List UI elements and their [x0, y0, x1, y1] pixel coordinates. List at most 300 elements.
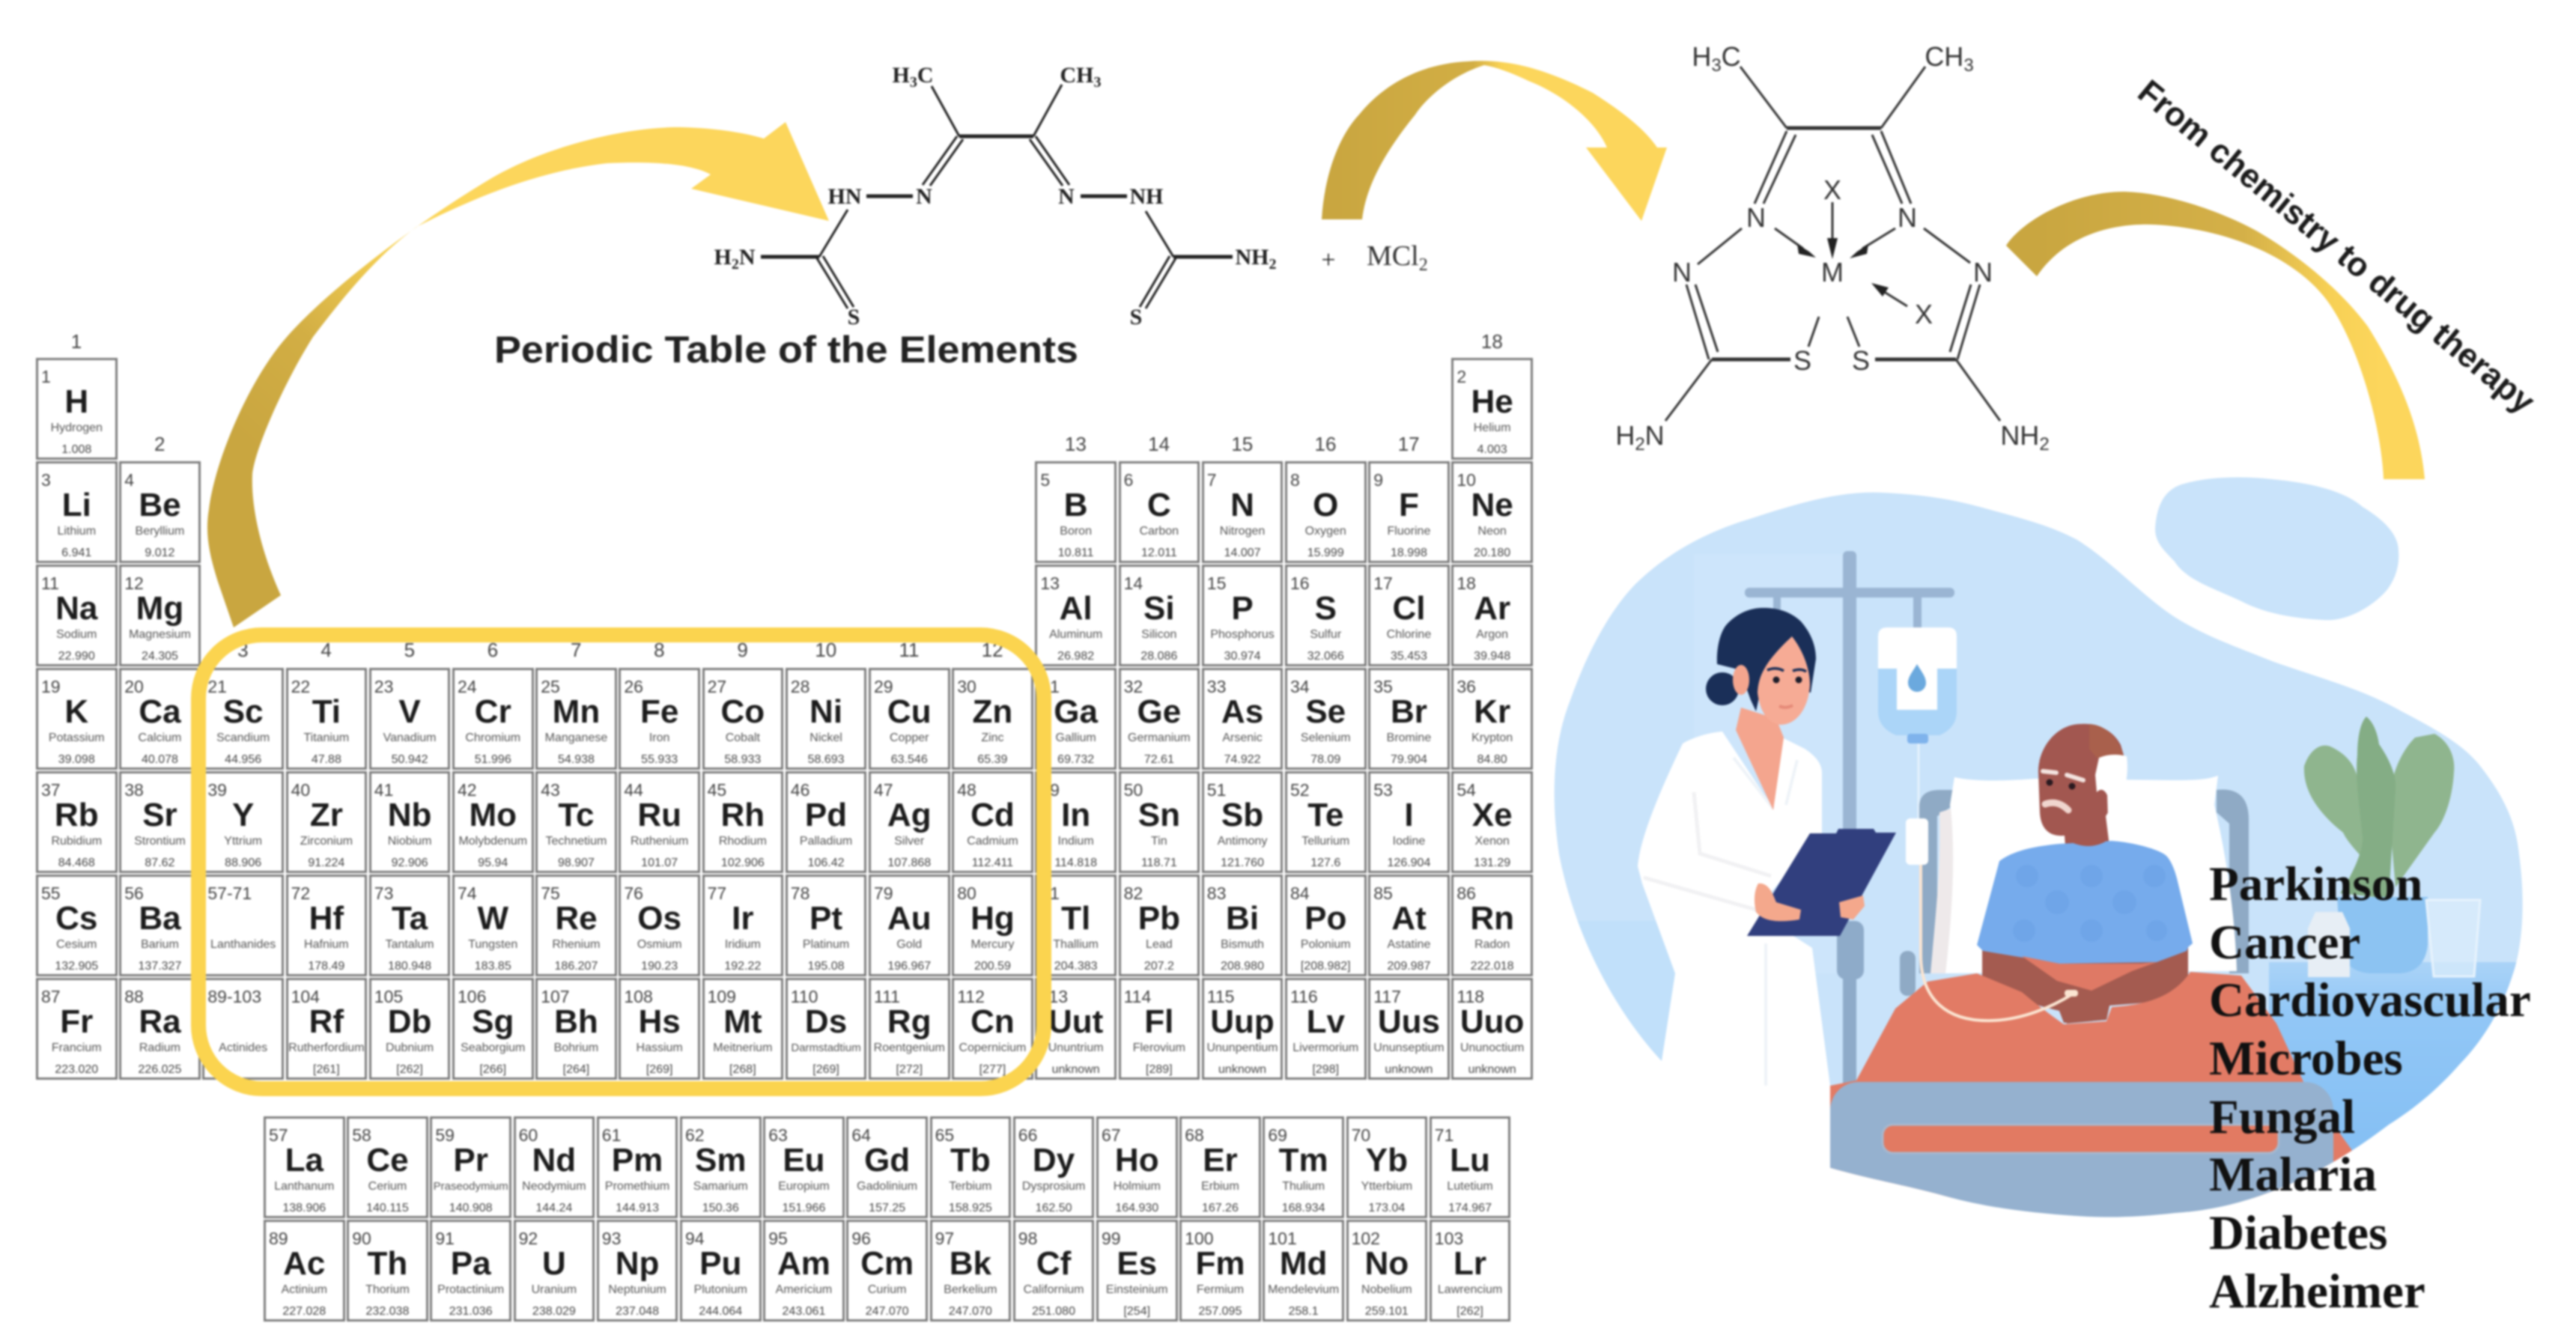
element Sb: 121.760	[1221, 857, 1264, 869]
group numbers: 11	[899, 639, 920, 661]
element In: 114.818	[1054, 857, 1097, 869]
element U: 92	[519, 1229, 538, 1248]
metal complex molecule: CH	[1925, 41, 1963, 72]
element Cl: Cl	[1392, 590, 1425, 627]
element Db: Db	[388, 1003, 431, 1040]
element Tl	[1035, 875, 1117, 976]
element Hs: [269]	[646, 1063, 672, 1075]
element In: 49	[1040, 780, 1060, 800]
metal complex molecule	[1615, 41, 2050, 454]
element H: 1	[41, 367, 51, 386]
periodic table main grid	[34, 330, 1534, 1081]
element Te: Te	[1307, 797, 1343, 833]
element Ti: 22	[291, 677, 310, 696]
actinides placeholder: 89-103	[207, 987, 261, 1006]
element Hf: 72	[291, 884, 310, 903]
element Lu: 71	[1435, 1125, 1453, 1145]
element Nb	[369, 771, 450, 873]
element Md: Md	[1280, 1245, 1327, 1282]
element U: U	[542, 1245, 566, 1282]
element Xe: Xenon	[1475, 834, 1510, 848]
element Pb	[1119, 875, 1200, 976]
element Tl: 204.383	[1054, 960, 1098, 972]
element Ds: Ds	[805, 1003, 847, 1040]
group numbers: 4	[321, 639, 332, 661]
element Rf	[286, 978, 367, 1080]
element Ta: 73	[374, 884, 393, 903]
element Yb: 70	[1352, 1125, 1370, 1145]
group numbers: 2	[154, 433, 165, 455]
element Md: 101	[1268, 1229, 1297, 1248]
group numbers	[71, 330, 1504, 661]
element H: 1.008	[61, 443, 91, 455]
element Te: 127.6	[1310, 857, 1340, 869]
metal complex molecule: NH	[2000, 420, 2039, 451]
element As: 33	[1207, 677, 1226, 696]
element P	[1202, 565, 1283, 666]
element Ac	[264, 1220, 344, 1321]
lanthanides placeholder	[202, 875, 284, 976]
disease list: Fungal	[2209, 1090, 2355, 1144]
element Lu: 174.967	[1448, 1201, 1492, 1214]
element Tm: Thulium	[1282, 1180, 1325, 1192]
element Cm: Cm	[860, 1245, 914, 1282]
element Db: [262]	[396, 1063, 423, 1075]
element Hg: Hg	[970, 900, 1015, 937]
element Mt	[702, 978, 783, 1080]
main background blob	[1543, 479, 2531, 1232]
element Mn: Mn	[553, 693, 600, 730]
element Mo: 95.94	[478, 857, 508, 869]
element Na: 11	[41, 574, 59, 593]
face	[1758, 636, 1810, 725]
element Th: 232.038	[366, 1304, 409, 1318]
element Fr: Francium	[52, 1041, 102, 1054]
element Ca: 40.078	[142, 753, 178, 765]
element N: Nitrogen	[1220, 524, 1265, 538]
element I: 53	[1373, 780, 1393, 800]
element Ba: Ba	[139, 900, 181, 937]
element Ba: Barium	[141, 937, 179, 951]
element Fe: Iron	[649, 731, 669, 744]
element Mo: Mo	[469, 797, 517, 833]
element S: 32.066	[1307, 650, 1344, 662]
doctor	[1638, 608, 1896, 1176]
element Nd: Neodymium	[522, 1180, 586, 1192]
bed footboard	[1830, 1082, 2333, 1232]
element Si: Si	[1143, 590, 1175, 627]
metal complex molecule: H	[1615, 420, 1635, 451]
group numbers: 5	[404, 639, 415, 661]
element Xe: Xe	[1472, 797, 1513, 833]
element Am: Americium	[776, 1283, 832, 1295]
ligand molecule: 2	[1269, 256, 1276, 273]
element Dy	[1013, 1116, 1094, 1217]
element Na: Sodium	[56, 627, 97, 641]
element Rg: Rg	[887, 1003, 932, 1040]
element Np: Neptunium	[608, 1283, 666, 1295]
element Zn: Zinc	[981, 731, 1004, 744]
element Ir	[702, 875, 783, 976]
element Ne: Ne	[1471, 487, 1513, 523]
element La: 138.906	[282, 1201, 326, 1214]
element Pt: Platinum	[803, 937, 849, 951]
element Si	[1119, 565, 1200, 666]
element Fm: 100	[1185, 1229, 1214, 1248]
element Sc: Scandium	[216, 731, 270, 744]
element Fl: [289]	[1146, 1063, 1173, 1075]
element Sb: 51	[1207, 780, 1226, 800]
element Se	[1285, 668, 1366, 770]
element Ru	[619, 771, 700, 873]
element Pm	[597, 1116, 678, 1217]
actinides placeholder	[202, 978, 284, 1080]
element Mo: 42	[458, 780, 477, 800]
element Pa: 91	[435, 1229, 455, 1248]
element Np	[597, 1220, 678, 1321]
element Bk: Berkelium	[944, 1283, 997, 1295]
element O: O	[1313, 487, 1338, 523]
element Rb: 84.468	[58, 857, 95, 869]
arrow: periodic table to ligand	[207, 122, 829, 627]
element Bh	[535, 978, 617, 1080]
element He: Helium	[1474, 421, 1511, 434]
element Y: Yttrium	[224, 834, 262, 848]
element Mg: 24.305	[142, 650, 178, 662]
element Ca: Ca	[139, 693, 181, 730]
element Pt	[786, 875, 866, 976]
plus sign and metal salt: MCl	[1367, 240, 1419, 272]
element Ni: 58.693	[808, 753, 845, 765]
blanket	[1829, 970, 2353, 1163]
element Os: Os	[637, 900, 681, 937]
element V: Vanadium	[383, 731, 436, 744]
element Cr: 24	[458, 677, 477, 696]
element Bh: 107	[541, 987, 570, 1006]
element Xe: 131.29	[1474, 857, 1510, 869]
element Nd: 60	[519, 1125, 538, 1145]
element Sm	[680, 1116, 761, 1217]
element Zn: 65.39	[977, 753, 1007, 765]
neck	[1736, 708, 1784, 810]
element Sr: 87.62	[145, 857, 174, 869]
element Sn: Sn	[1138, 797, 1180, 833]
element Br	[1368, 668, 1450, 770]
lanthanides placeholder: 57-71	[207, 884, 252, 903]
metal complex molecule: 2	[2039, 434, 2050, 454]
element Uus: Ununseptium	[1373, 1041, 1445, 1054]
element Be: Be	[139, 487, 181, 523]
element Cr: 51.996	[475, 753, 511, 765]
element Sb: Antimony	[1218, 834, 1267, 848]
element Li	[36, 461, 117, 563]
element Sm: Samarium	[693, 1180, 748, 1192]
element Ge: Germanium	[1128, 731, 1191, 744]
element Uuo: Ununoctium	[1460, 1041, 1524, 1054]
element U: Uranium	[532, 1283, 577, 1295]
element Li: Lithium	[57, 524, 96, 538]
element Cl: Chlorine	[1387, 627, 1431, 641]
element Cs	[36, 875, 117, 976]
element Ca	[119, 668, 201, 770]
element Pd	[786, 771, 866, 873]
element At	[1368, 875, 1450, 976]
metal complex molecule: X	[1915, 299, 1933, 329]
element Uut: Ununtrium	[1048, 1041, 1104, 1054]
element Es: [254]	[1123, 1304, 1150, 1318]
element Cl	[1368, 565, 1450, 666]
ligand molecule: NH	[1236, 245, 1269, 270]
element Sn: Tin	[1151, 834, 1167, 848]
element Ni: 28	[791, 677, 809, 696]
element Cn: Cn	[970, 1003, 1015, 1040]
element Te: 52	[1290, 780, 1310, 800]
element Ta	[369, 875, 450, 976]
element Uup: Ununpentium	[1206, 1041, 1278, 1054]
metal complex molecule: N	[1898, 202, 1917, 233]
element Mt: 109	[708, 987, 736, 1006]
element W	[452, 875, 533, 976]
element Ds: [269]	[812, 1063, 839, 1075]
element In	[1035, 771, 1117, 873]
ligand molecule: HN	[828, 184, 862, 209]
element Uus: Uus	[1378, 1003, 1440, 1040]
element Rb	[36, 771, 117, 873]
element Br: Bromine	[1387, 731, 1431, 744]
element Kr	[1451, 668, 1533, 770]
element Zn: 30	[957, 677, 976, 696]
element Eu: 63	[768, 1125, 788, 1145]
element Gd: 64	[851, 1125, 871, 1145]
element Ce: Ce	[366, 1142, 409, 1179]
element Cu: 63.546	[891, 753, 928, 765]
element Sr	[119, 771, 201, 873]
element Fl: Fl	[1144, 1003, 1173, 1040]
element Hs	[619, 978, 700, 1080]
element Ne: Neon	[1478, 524, 1507, 538]
ligand molecule: H	[892, 63, 910, 88]
element Co	[702, 668, 783, 770]
element Kr: 84.80	[1477, 753, 1507, 765]
element Be: 9.012	[145, 547, 174, 559]
element Uuo: 118	[1456, 987, 1484, 1006]
element Uuo	[1451, 978, 1533, 1080]
element Sr: 38	[124, 780, 144, 800]
element Tb: 158.925	[949, 1201, 992, 1214]
element Os	[619, 875, 700, 976]
element Uup: Uup	[1210, 1003, 1275, 1040]
group numbers: 9	[737, 639, 748, 661]
element Al: Al	[1060, 590, 1093, 627]
element Ne: 20.180	[1474, 547, 1510, 559]
element Es: Es	[1117, 1245, 1157, 1282]
element Fr	[36, 978, 117, 1080]
element As: Arsenic	[1222, 731, 1263, 744]
element Tb: Tb	[950, 1142, 991, 1179]
element Al: 13	[1040, 574, 1060, 593]
element Dy: Dysprosium	[1022, 1180, 1085, 1192]
element Ar: 18	[1456, 574, 1476, 593]
element Uus: unknown	[1385, 1063, 1433, 1075]
element Fr: 87	[41, 987, 61, 1006]
element Ar	[1451, 565, 1533, 666]
element Hg	[952, 875, 1033, 976]
element At: 85	[1373, 884, 1393, 903]
IV pole	[1745, 551, 1954, 1093]
element Cf	[1013, 1220, 1094, 1321]
element Db: 105	[374, 987, 403, 1006]
element C: Carbon	[1140, 524, 1179, 538]
ear	[1733, 665, 1749, 695]
element Re: 186.207	[555, 960, 598, 972]
element Sc	[202, 668, 284, 770]
element Rg: Roentgenium	[874, 1041, 945, 1054]
element Pu: Pu	[699, 1245, 741, 1282]
element Ru: 44	[624, 780, 643, 800]
element Cm	[846, 1220, 928, 1321]
element N: 7	[1207, 470, 1217, 490]
element Rn	[1451, 875, 1533, 976]
element La: 57	[269, 1125, 288, 1145]
metal complex molecule: N	[1746, 202, 1766, 233]
element Uut: 113	[1040, 987, 1068, 1006]
element Re: Rhenium	[552, 937, 600, 951]
element Po: Polonium	[1301, 937, 1351, 951]
element Te	[1285, 771, 1366, 873]
element V	[369, 668, 450, 770]
element K: K	[64, 693, 88, 730]
element Xe	[1451, 771, 1533, 873]
group numbers: 16	[1315, 433, 1336, 455]
element Rh: 102.906	[721, 857, 765, 869]
element Ho: 164.930	[1115, 1201, 1158, 1214]
element Ta: Ta	[392, 900, 428, 937]
element H: H	[64, 383, 88, 420]
disease list: Microbes	[2209, 1032, 2403, 1086]
element C: C	[1147, 487, 1171, 523]
element Sg	[452, 978, 533, 1080]
element Zr	[286, 771, 367, 873]
element Nd: 144.24	[535, 1201, 572, 1214]
element Co: 58.933	[724, 753, 761, 765]
small background blob	[2155, 478, 2399, 620]
arms	[1982, 945, 2188, 1023]
coat	[1638, 732, 1830, 1176]
element Tb: 65	[935, 1125, 954, 1145]
element Cu: Cu	[887, 693, 932, 730]
element Fe: Fe	[640, 693, 678, 730]
element Er: 68	[1185, 1125, 1204, 1145]
illustration: hospital scene	[1543, 478, 2531, 1232]
element Mn: 25	[541, 677, 560, 696]
element Hg: 80	[957, 884, 976, 903]
element La: La	[285, 1142, 323, 1179]
element Fm	[1179, 1220, 1261, 1321]
element Pu: Plutonium	[694, 1283, 747, 1295]
element Au: 196.967	[887, 960, 931, 972]
group numbers: 13	[1065, 433, 1087, 455]
element Md: 258.1	[1289, 1304, 1319, 1318]
element Po	[1285, 875, 1366, 976]
metal complex molecule: H	[1692, 41, 1711, 72]
element As	[1202, 668, 1283, 770]
element N	[1202, 461, 1283, 563]
ligand molecule: N	[739, 245, 756, 270]
element Bi	[1202, 875, 1283, 976]
element Ru: Ruthenium	[631, 834, 688, 848]
element Au: Au	[887, 900, 932, 937]
element Th: Th	[368, 1245, 407, 1282]
element Lv	[1285, 978, 1366, 1080]
element Zn: Zn	[973, 693, 1012, 730]
element Lv: Lv	[1307, 1003, 1345, 1040]
element Ra	[119, 978, 201, 1080]
disease list: Cardiovascular	[2209, 973, 2531, 1027]
element Np: 237.048	[616, 1304, 659, 1318]
element V: V	[398, 693, 421, 730]
element Yb	[1346, 1116, 1427, 1217]
bed head rails	[1900, 789, 2249, 996]
element Kr: Krypton	[1471, 731, 1513, 744]
element Ra: Ra	[139, 1003, 181, 1040]
element Sg: Seaborgium	[461, 1041, 525, 1054]
element Xe: 54	[1456, 780, 1476, 800]
element S	[1285, 565, 1366, 666]
element Kr: 36	[1456, 677, 1476, 696]
element Fm: 257.095	[1199, 1304, 1242, 1318]
element Eu: Eu	[783, 1142, 825, 1179]
disease list: Diabetes	[2209, 1206, 2387, 1260]
element Rh	[702, 771, 783, 873]
element Gd: Gd	[864, 1142, 910, 1179]
element W: 183.85	[475, 960, 511, 972]
shirt	[1977, 841, 2193, 964]
element Fl: 114	[1124, 987, 1151, 1006]
element Fe: 26	[624, 677, 643, 696]
element Bk: 97	[935, 1229, 954, 1248]
element He	[1451, 358, 1533, 460]
element Ne	[1451, 461, 1533, 563]
group numbers: 6	[487, 639, 498, 661]
element Ho: Holmium	[1114, 1180, 1161, 1192]
element Ti: Ti	[312, 693, 341, 730]
element Rn: 86	[1456, 884, 1476, 903]
element Br: 79.904	[1391, 753, 1427, 765]
element Tc: Tc	[558, 797, 594, 833]
element Yb: Ytterbium	[1361, 1180, 1412, 1192]
element Fl: Flerovium	[1133, 1041, 1185, 1054]
element Bi: 208.980	[1221, 960, 1264, 972]
element P: P	[1231, 590, 1254, 627]
metal complex molecule: S	[1793, 345, 1811, 376]
element Uuo: unknown	[1468, 1063, 1516, 1075]
element Fr: 223.020	[55, 1063, 98, 1075]
group numbers: 8	[654, 639, 665, 661]
element Be: Beryllium	[136, 524, 184, 538]
element No: 259.101	[1365, 1304, 1409, 1318]
ligand molecule: S	[1130, 305, 1142, 329]
element Tl: 81	[1040, 884, 1060, 903]
element Dy: 162.50	[1036, 1201, 1072, 1214]
element Gd: Gadolinium	[857, 1180, 917, 1192]
element Ga: 69.732	[1057, 753, 1094, 765]
element Nb: Nb	[388, 797, 431, 833]
element Ni: Ni	[809, 693, 842, 730]
element Cd	[952, 771, 1033, 873]
element Cr	[452, 668, 533, 770]
element Ds: 110	[791, 987, 818, 1006]
element Cn: [277]	[979, 1063, 1006, 1075]
